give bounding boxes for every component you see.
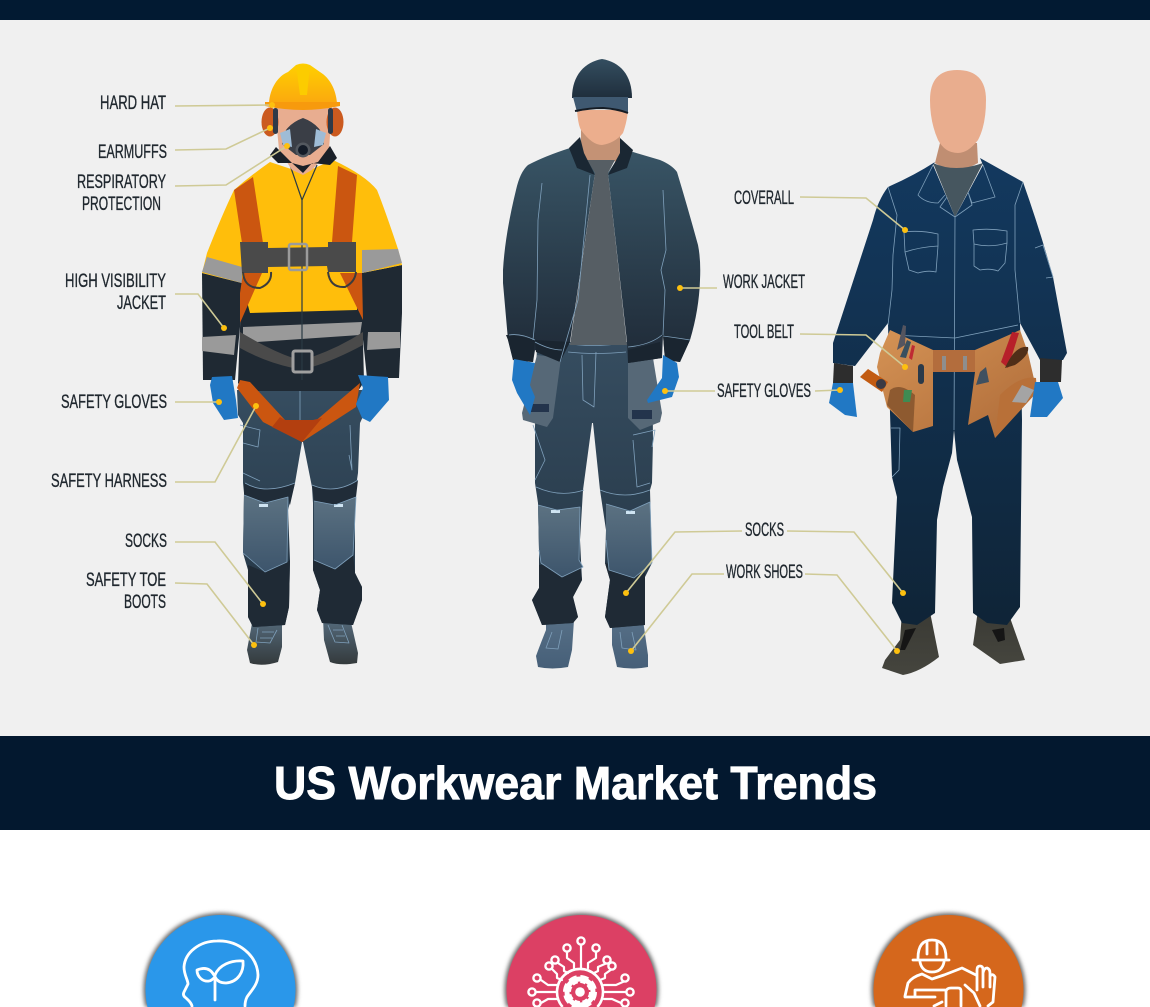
callout: safety gloves left: SAFETY GLOVES [61, 392, 167, 413]
callout: safety toe boots: SAFETY TOE [86, 570, 166, 591]
callout: socks left [125, 531, 266, 607]
callout: work shoes: WORK SHOES [726, 562, 803, 583]
figure: worker in coverall with tool belt [829, 70, 1067, 675]
callout: safety toe boots [86, 570, 257, 648]
callout: work jacket [677, 272, 805, 293]
callout: hard hat [100, 93, 275, 114]
callout: safety gloves right [662, 381, 843, 402]
harness straps and chest belt [234, 166, 363, 442]
high visibility jacket [202, 160, 402, 391]
work jacket [503, 137, 700, 363]
blue safety gloves [210, 375, 389, 422]
icon: worker with house and raised hand on orange circle [872, 913, 1026, 1007]
top navy bar [0, 0, 1150, 20]
callout: earmuffs: EARMUFFS [98, 142, 167, 163]
callout: respiratory protection [77, 143, 290, 215]
work boots [882, 610, 1025, 675]
neck and face [930, 70, 986, 217]
callout: coverall [734, 188, 908, 233]
t-shirt and neck [570, 125, 627, 345]
face [577, 110, 628, 145]
heading: US Workwear Market Trends [274, 757, 877, 809]
icon: sustainability head on blue circle [144, 913, 298, 1007]
callout: high visibility jacket: JACKET [117, 293, 166, 314]
callout: socks left: SOCKS [125, 531, 167, 552]
safety toe boots [247, 618, 358, 665]
gloves and wrists [829, 358, 1063, 417]
callout: safety harness [51, 403, 259, 492]
callout: work shoes [628, 562, 900, 654]
icon: technology gear circuit on red circle [504, 913, 658, 1007]
title banner [0, 736, 1150, 830]
work shoes [536, 620, 648, 668]
callout: coverall: COVERALL [734, 188, 794, 209]
callout: safety harness: SAFETY HARNESS [51, 471, 167, 492]
callout: tool belt: TOOL BELT [734, 322, 794, 343]
panel: workwear illustration [0, 20, 1150, 736]
callout: socks right: SOCKS [745, 520, 784, 541]
figure: worker in high visibility safety gear [202, 64, 402, 665]
cap [572, 59, 632, 113]
head, hard hat, earmuffs and respirator [262, 64, 344, 175]
callout: work jacket: WORK JACKET [723, 272, 805, 293]
white section [0, 830, 1150, 1007]
callout: safety toe boots: BOOTS [124, 592, 166, 613]
trousers [237, 390, 367, 627]
callout: safety gloves right: SAFETY GLOVES [717, 381, 811, 402]
trousers [522, 342, 662, 628]
callout: high visibility jacket [65, 271, 227, 331]
callout: socks right [623, 520, 906, 596]
callout: tool belt [734, 322, 908, 370]
callout: hard hat: HARD HAT [100, 93, 166, 114]
tool belt [860, 325, 1037, 438]
callout: high visibility jacket: HIGH VISIBILITY [65, 271, 166, 292]
callout: respiratory protection: RESPIRATORY [77, 172, 166, 193]
blue coverall [833, 158, 1067, 625]
figure: worker in jacket, cap and trousers [503, 59, 700, 668]
blue safety gloves [512, 355, 679, 415]
callout: respiratory protection: PROTECTION [82, 194, 161, 215]
callout: earmuffs [98, 125, 273, 163]
